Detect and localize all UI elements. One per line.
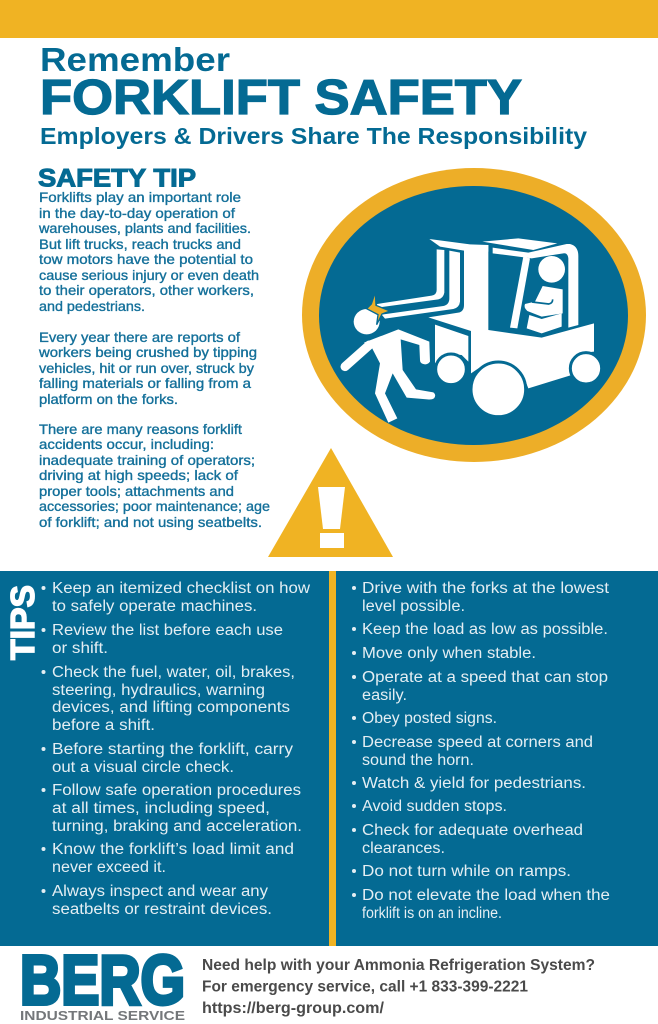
safety tip body text: workers being crushed by tipping [38,345,257,360]
panel: left tips list: Review the list before each use [52,622,283,639]
panel: right tips list: clearances. [362,840,445,857]
safety tip body text: tow motors have the potential to [39,252,253,267]
panel: right tips list: Do not turn while on ramps. [362,863,571,880]
safety tip body text: platform on the forks. [39,392,178,407]
safety tip body text: of forklift; and not using seatbelts. [39,515,262,530]
panel: right tips list: Watch & yield for pedestrians. [362,775,586,792]
pedestrian figure and forks [345,239,488,423]
title block [40,41,587,149]
safety tip body text [38,190,270,530]
title block: Employers & Drivers Share The Responsibility [40,123,587,149]
panel: left tips list: at all times, including speed, [52,800,270,817]
title block: FORKLIFT SAFETY [40,70,522,125]
icon: warning triangle [268,448,393,557]
safety tip body text: Every year there are reports of [39,330,240,345]
logo: Berg Industrial Service: INDUSTRIAL SERVICE [20,1009,185,1023]
safety tip body text: But lift trucks, reach trucks and [39,237,241,252]
safety tip body text: driving at high speeds; lack of [39,468,238,483]
panel: right tips list: Avoid sudden stops. [362,798,507,815]
footer contact text: https://berg-group.com/ [202,1000,385,1017]
panel: left tips list: steering, hydraulics, warning [52,682,265,699]
safety tip body text: accessories; poor maintenance; age [39,499,270,514]
panel: right tips list: Drive with the forks at the lowest [362,580,610,597]
panel: left tips list: or shift. [52,640,108,657]
safety tip body text: to their operators, other workers, [39,283,254,298]
safety tip body text: There are many reasons forklift [39,422,242,437]
safety tip body text: Forklifts play an important role [39,190,241,205]
panel: left tips list: Follow safe operation procedures [52,782,301,799]
panel: right tips list: forklift is on an incline. [362,905,502,922]
panel: left tips list: seatbelts or restraint devices. [52,901,272,918]
panel: right tips list: sound the horn. [362,752,474,769]
logo: Berg Industrial Service: BERG [20,941,185,1019]
panel: left tips list: devices, and lifting components [52,699,290,716]
panel: left tips list: Keep an itemized checklist on how [52,580,311,597]
safety tip body text: vehicles, hit or run over, struck by [39,361,254,376]
safety tip body text: inadequate training of operators; [39,453,255,468]
panel: right tips list: Decrease speed at corners and [362,734,593,751]
safety tip body text: accidents occur, including: [39,437,214,452]
forklift body and cab [428,238,602,417]
panel: left tips list [42,580,311,918]
title block: Remember [40,41,230,78]
panel: right tips list: level possible. [362,598,465,615]
panel: right tips list [352,580,610,922]
safety tip heading: SAFETY TIP [38,164,196,192]
top gold banner [0,0,658,38]
safety tip body text: cause serious injury or even death [39,268,259,283]
panel: right tips list: Move only when stable. [362,645,536,662]
panel: left tips list: Check the fuel, water, oil, brakes, [52,664,295,681]
tips vertical heading: TIPS [4,585,41,660]
panel: tips background [0,571,658,946]
panel: right tips list: Keep the load as low as possible. [362,621,608,638]
panel: left tips list: Know the forklift’s load limit and [52,841,294,858]
safety tip body text: and pedestrians. [39,299,145,314]
panel: left tips list: out a visual circle check. [52,759,234,776]
icon: forklift hitting pedestrian in circle [302,168,646,462]
safety tip body text: warehouses, plants and facilities. [38,221,251,236]
footer contact text: Need help with your Ammonia Refrigeration System? [202,957,595,974]
center gold divider [329,571,336,946]
panel: left tips list: Always inspect and wear any [52,883,268,900]
panel: left tips list: to safely operate machines. [52,598,257,615]
panel: left tips list: Before starting the forklift, carry [52,741,293,758]
panel: left tips list: never exceed it. [52,859,166,876]
panel: right tips list: Operate at a speed that can stop [362,669,608,686]
safety tip body text: proper tools; attachments and [39,484,234,499]
panel: right tips list: Obey posted signs. [362,710,497,727]
panel: right tips list: Do not elevate the load when the [362,887,610,904]
panel: right tips list: Check for adequate overhead [362,822,583,839]
safety tip body text: in the day-to-day operation of [39,206,235,221]
lightning bolt impact [367,292,390,325]
panel: left tips list: turning, braking and acceleration. [52,818,302,835]
panel: right tips list: easily. [362,687,407,704]
panel: left tips list: before a shift. [52,717,155,734]
safety tip body text: falling materials or falling from a [39,376,251,391]
footer contact text [202,957,595,1017]
footer contact text: For emergency service, call +1 833-399-2221 [202,978,528,996]
